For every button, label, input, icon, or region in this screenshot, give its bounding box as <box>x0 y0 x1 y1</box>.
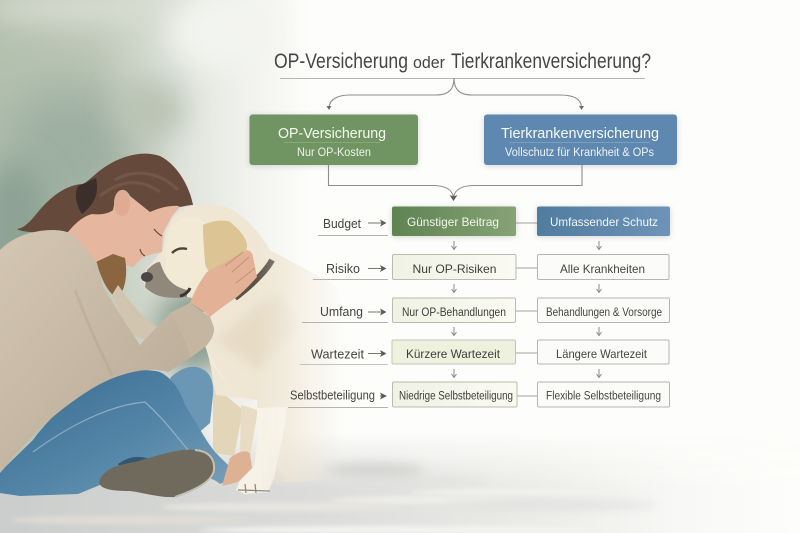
row: Budget: Budget <box>323 217 361 231</box>
title: OP-Versicherung <box>274 50 408 73</box>
panel: Tierkrankenversicherung: Tierkrankenversicherung <box>501 125 659 142</box>
row: Risiko: Alle Krankheiten <box>560 262 645 276</box>
far arm <box>112 285 157 340</box>
panel: OP-Versicherung <box>250 114 418 165</box>
row: Wartezeit: Kürzere Wartezeit <box>406 347 501 361</box>
title: Tierkrankenversicherung? <box>451 50 651 73</box>
row: Umfang <box>302 298 670 322</box>
row connectors <box>516 223 537 396</box>
row: Budget <box>318 206 670 236</box>
row: Selbstbeteiligung: Flexible Selbstbeteiligung <box>546 390 661 402</box>
row: Selbstbeteiligung: Selbstbeteiligung <box>290 388 375 402</box>
panel: OP-Versicherung: OP-Versicherung <box>278 125 386 142</box>
row: Risiko: Nur OP-Risiken <box>412 262 496 276</box>
row: Selbstbeteiligung <box>288 382 670 408</box>
eyebrow, eye and smile <box>140 229 162 256</box>
floor <box>0 446 660 533</box>
arrow: split from title to both options <box>326 78 584 110</box>
hair strand under chin <box>96 254 126 298</box>
far jeans leg <box>170 366 214 431</box>
panel: Tierkrankenversicherung <box>484 114 677 165</box>
dog <box>141 204 328 494</box>
woman <box>0 154 257 497</box>
cuff <box>170 303 214 358</box>
row: Wartezeit: Wartezeit <box>311 348 365 362</box>
hair <box>17 154 193 232</box>
hair highlights <box>100 173 178 196</box>
row: Wartezeit <box>300 340 669 364</box>
panel: OP-Versicherung: Nur OP-Kosten <box>297 147 371 159</box>
sweater <box>0 230 214 473</box>
subjects fading into the page <box>0 154 352 497</box>
title <box>274 50 651 73</box>
shoe <box>99 450 214 497</box>
row: Budget: Umfassender Schutz <box>550 215 658 229</box>
fingers <box>225 252 255 283</box>
sleeve shading <box>75 290 112 375</box>
panel: Tierkrankenversicherung: Vollschutz für Krankheit & OPs <box>505 147 654 159</box>
row: Risiko: Risiko <box>326 262 360 276</box>
row: Risiko <box>313 254 669 280</box>
neck and face <box>68 198 180 267</box>
hair tie <box>76 178 97 214</box>
hand <box>190 250 257 317</box>
row: Selbstbeteiligung: Niedrige Selbstbeteiligung <box>399 390 513 402</box>
row: Budget: Günstiger Beitrag <box>407 215 499 229</box>
soft shadow behind the dog <box>325 463 425 477</box>
down arrows between rows <box>452 241 602 378</box>
row: Umfang: Umfang <box>320 305 363 319</box>
arrow: merge options into comparison <box>328 165 582 201</box>
row: Umfang: Nur OP-Behandlungen <box>402 307 506 319</box>
jeans <box>0 370 230 496</box>
title rule <box>280 78 645 80</box>
ankle <box>222 451 252 486</box>
row: Wartezeit: Längere Wartezeit <box>556 347 648 361</box>
row: Umfang: Behandlungen & Vorsorge <box>546 307 662 319</box>
title: oder <box>413 53 445 72</box>
ear <box>114 190 130 216</box>
